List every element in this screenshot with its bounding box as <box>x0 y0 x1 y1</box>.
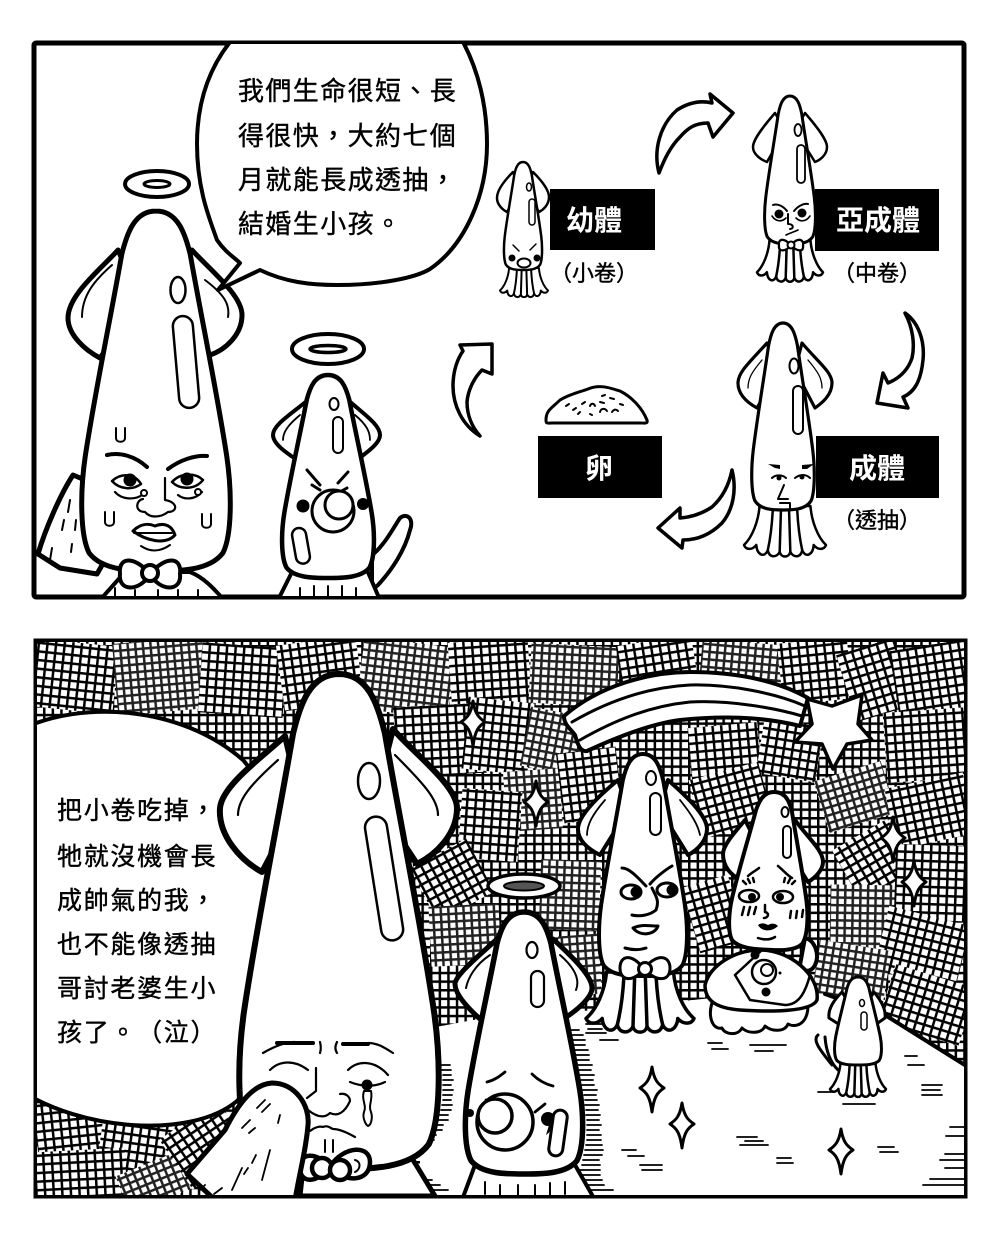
character: juvenile squid <box>497 162 549 297</box>
face: crying <box>263 1042 393 1137</box>
character: large squid with bow tie <box>38 211 242 600</box>
character: bow tie father squid <box>578 754 707 1032</box>
face: large squid <box>105 428 211 550</box>
speech bubble: if eaten <box>37 710 264 1128</box>
speech text <box>57 797 217 1047</box>
arrow: juvenile to sub-adult <box>657 94 733 173</box>
panel: wishes <box>20 634 976 1214</box>
baby squid <box>705 950 817 1034</box>
speech text: 牠就沒機會長 <box>57 843 217 871</box>
arrow: adult to egg <box>658 470 734 548</box>
arrow: sub-adult to adult <box>877 313 923 408</box>
bow tie <box>120 560 180 588</box>
character: adult squid <box>738 323 832 556</box>
label: egg: 卵 <box>585 453 613 484</box>
speech text: 孩了。（泣） <box>57 1019 217 1047</box>
speech text: 哥討老婆生小 <box>57 975 217 1003</box>
icon: eggs <box>546 387 647 423</box>
rainbow and shooting star <box>564 672 872 769</box>
label: juvenile <box>550 189 655 250</box>
speech text <box>238 76 457 239</box>
character: sub-adult squid <box>753 96 827 282</box>
character: mother squid holding baby <box>705 790 823 1034</box>
halftone grid background <box>27 634 976 1214</box>
speech text: 也不能像透抽 <box>57 931 217 959</box>
ground hatching <box>412 1030 613 1190</box>
speech text: 把小卷吃掉， <box>57 797 217 825</box>
arrow: egg to juvenile <box>453 344 492 436</box>
panel: life cycle <box>34 42 964 600</box>
skirt: large squid <box>102 571 222 596</box>
label: adult: 成體 <box>849 453 905 484</box>
speech text: 成帥氣的我， <box>57 887 217 915</box>
character: small squid with halo <box>125 171 411 600</box>
label: juvenile: 幼體 <box>566 205 622 236</box>
bow tie <box>300 1140 370 1180</box>
speech text: 月就能長成透抽， <box>238 165 457 195</box>
character: front squid with halo <box>455 874 595 1200</box>
icon: sparkles <box>461 701 926 1174</box>
speech text: 我們生命很短、長 <box>238 76 457 106</box>
character: tiny squid <box>816 977 886 1097</box>
caption: medium squid: （中卷） <box>833 261 921 286</box>
hand <box>187 1083 308 1200</box>
skirt: small squid <box>278 571 380 596</box>
speech bubble: life is short <box>197 42 487 290</box>
ground <box>420 993 968 1200</box>
label: egg <box>538 436 662 498</box>
label: sub-adult <box>815 189 939 251</box>
speech text: 結婚生小孩。 <box>238 209 402 239</box>
label: sub-adult: 亞成體 <box>836 205 920 236</box>
speech text: 得很快，大約七個 <box>238 121 457 151</box>
label: adult <box>816 436 939 498</box>
character: large crying squid <box>187 674 457 1200</box>
caption: small squid: （小卷） <box>550 261 638 286</box>
caption: bigfin squid: （透抽） <box>833 508 921 533</box>
